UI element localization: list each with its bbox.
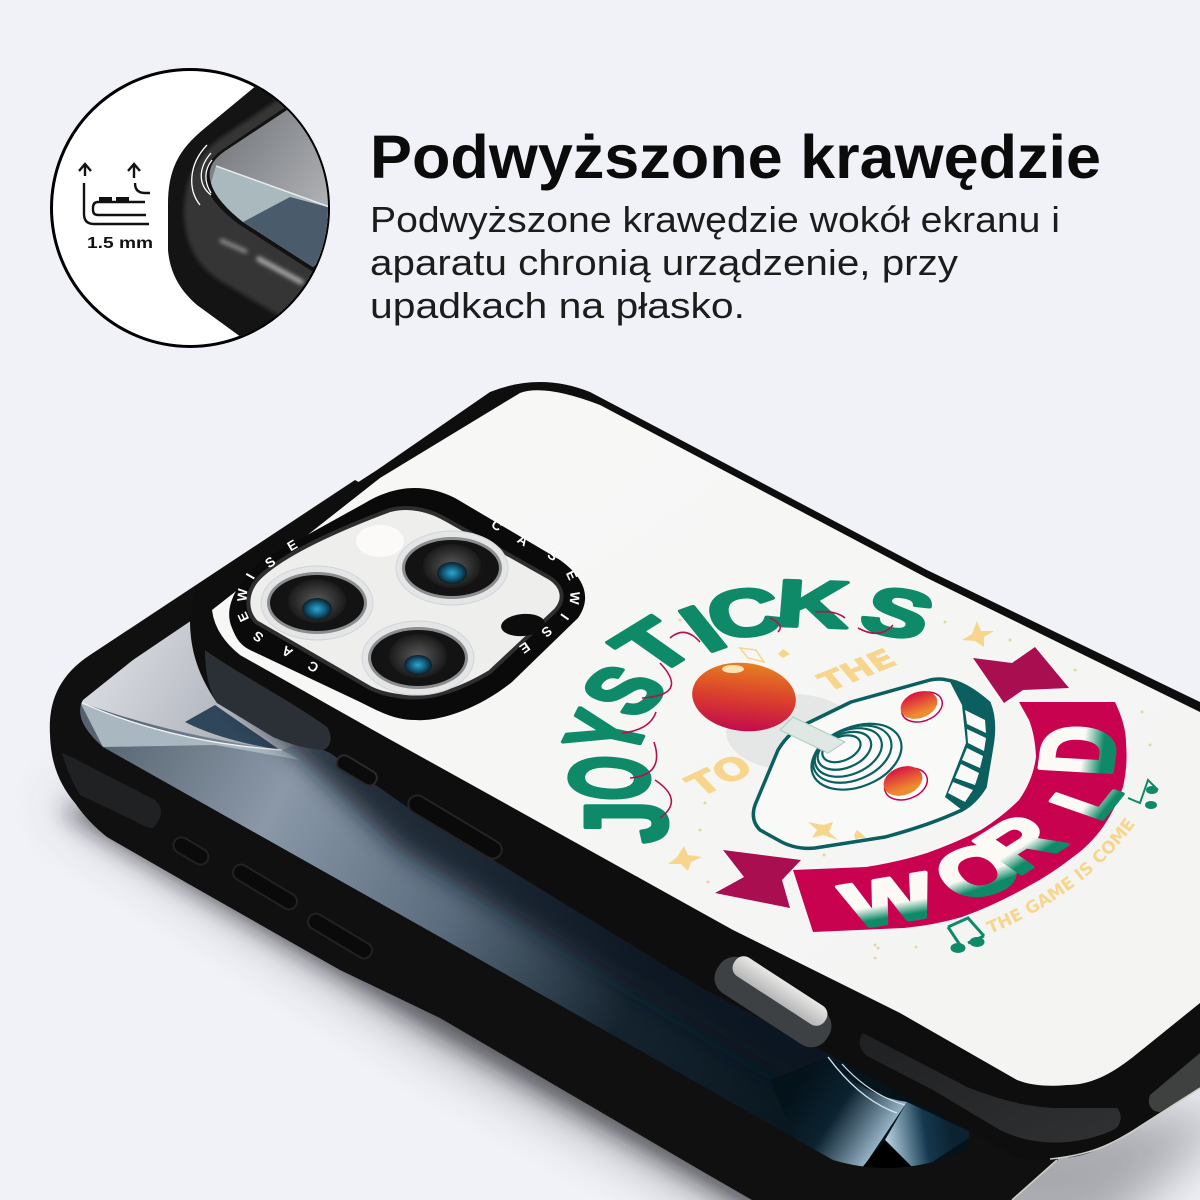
artwork: joysticks lettering: S — [558, 652, 689, 729]
camera ring text: lower left — [234, 537, 321, 676]
artwork: joysticks to the world — [540, 566, 1159, 960]
camera ring text: upper right — [489, 516, 583, 656]
artwork: bottom button — [879, 761, 932, 806]
front phone: corner pad left — [205, 650, 331, 750]
artwork: world lettering: D — [1017, 722, 1139, 778]
camera ring text: upper right: E — [517, 639, 533, 656]
inset: raised edge diagram — [79, 164, 150, 224]
inset: screen glass — [210, 110, 328, 267]
body text: Podwyższone krawędzie wokół ekranu i — [370, 199, 1060, 240]
camera island — [229, 488, 585, 720]
artwork: world lettering: R — [954, 800, 1084, 887]
camera ring text: upper right: C — [489, 516, 505, 535]
artwork: joysticks lettering: I — [664, 592, 741, 666]
camera ring text: lower left: I — [243, 571, 258, 582]
camera ring text: lower left: E — [235, 610, 252, 624]
artwork: joysticks lettering: T — [592, 605, 715, 688]
camera ring text: upper right: A — [515, 531, 531, 550]
front phone: power button — [405, 792, 505, 862]
camera ring text: lower left: S — [250, 628, 266, 645]
artwork: joysticks lettering: J — [561, 801, 691, 843]
artwork: joystick shaft — [780, 717, 845, 753]
artwork: world lettering: O — [917, 826, 1040, 917]
front phone: bottom edge highlight — [1012, 1088, 1200, 1200]
artwork: main ribbon — [793, 702, 1127, 932]
artwork: joystick base — [753, 679, 993, 848]
artwork: joysticks lettering: K — [774, 566, 852, 642]
artwork: joysticks lettering: O — [543, 751, 675, 805]
artwork: diamond outline — [740, 648, 764, 662]
artwork: joysticks lettering: S — [849, 571, 946, 655]
artwork: upper ribbon tail — [973, 647, 1069, 703]
artwork: joystick ball — [689, 658, 799, 736]
artwork: music note lower — [948, 918, 984, 952]
camera ring text: lower left: S — [262, 554, 278, 571]
artwork: stick shadow — [726, 694, 858, 770]
artwork: star left — [668, 846, 702, 871]
artwork: to: TO — [677, 748, 762, 804]
artwork: world lettering: L — [1034, 769, 1140, 828]
artwork: base stripes — [945, 682, 993, 810]
back phone: glass — [80, 622, 970, 1168]
camera island: outer ring — [229, 488, 585, 720]
artwork: joysticks lettering: C — [697, 572, 791, 654]
artwork: sparkle small — [854, 830, 866, 840]
artwork: lower ribbon tail — [715, 850, 801, 908]
artwork: tagline: THE GAME IS COME — [985, 817, 1135, 932]
artwork: top button — [897, 686, 947, 727]
artwork: world lettering: W — [832, 859, 947, 943]
front phone: corner pad bottom — [860, 1033, 1121, 1143]
phone shadow on background — [50, 760, 1200, 1200]
artwork: joysticks lettering: Y — [540, 702, 672, 763]
back phone: corner pad — [62, 753, 161, 828]
camera island: glass plate — [248, 508, 562, 698]
inset: case corner — [168, 86, 280, 336]
artwork: scattered dots — [588, 608, 1152, 960]
artwork: sparkle large — [808, 822, 838, 840]
camera ring text: lower left: C — [305, 657, 321, 676]
artwork: diamond small — [778, 649, 790, 658]
front phone: speaker grille — [1149, 1053, 1200, 1112]
inset: shock arcs — [192, 145, 212, 205]
artwork: garland vines — [622, 612, 893, 818]
back phone: volume up — [230, 862, 300, 912]
inset circle: raised edge close-up — [52, 60, 340, 346]
inset: thickness label: 1.5 mm — [87, 235, 153, 252]
body text — [370, 199, 1060, 326]
camera ring text: lower left: E — [285, 537, 300, 554]
camera ring text: upper right: S — [545, 547, 561, 564]
lens: left — [261, 566, 373, 640]
artwork: joystick cone — [802, 711, 911, 802]
back phone: wallpaper shards — [770, 1068, 907, 1166]
artwork: world lettering — [832, 722, 1140, 943]
front phone: action button — [334, 753, 379, 788]
body text: aparatu chronią urządzenie, przy — [370, 242, 958, 283]
camera ring text: upper right: I — [557, 611, 572, 623]
front phone: case body — [190, 382, 1200, 1200]
heading: Podwyższone krawędzie — [370, 123, 1101, 191]
artwork: music note upper — [1128, 780, 1158, 808]
camera ring text: upper right: S — [538, 623, 555, 640]
back phone: mute button — [171, 834, 211, 868]
front phone: silver side button — [708, 950, 838, 1054]
front phone: white back panel — [212, 390, 1200, 1086]
back phone: volume down — [305, 911, 375, 961]
artwork: the: THE — [811, 643, 903, 698]
camera ring text: lower left: A — [279, 642, 295, 661]
camera ring text: upper right: E — [563, 568, 580, 582]
back phone: screen side — [50, 480, 1060, 1200]
lens: right — [396, 531, 508, 605]
lens: microphone hole — [500, 612, 546, 638]
lens: bottom — [362, 621, 474, 695]
lens: flash — [356, 525, 404, 557]
camera ring text: upper right: W — [566, 591, 583, 605]
camera ring text: lower left: W — [234, 588, 251, 602]
artwork: joysticks lettering — [540, 566, 946, 843]
body text: upadkach na płasko. — [370, 285, 745, 326]
artwork: star right — [962, 621, 994, 647]
